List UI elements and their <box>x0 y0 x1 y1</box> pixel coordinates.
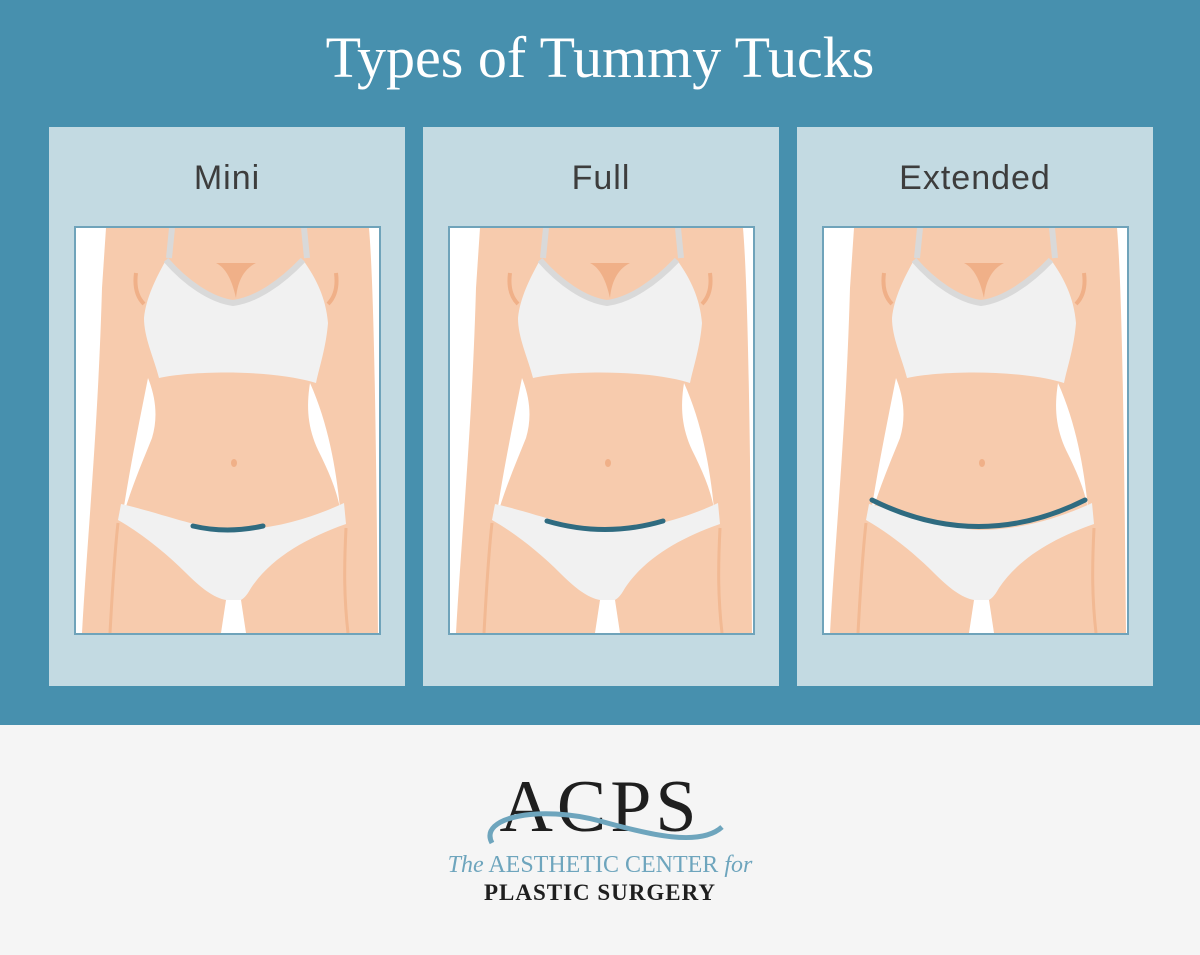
header background <box>0 0 1200 725</box>
panel: full <box>423 127 779 686</box>
title: Types of Tummy Tucks <box>326 25 874 90</box>
logo: ACPS <box>499 766 701 848</box>
illustration: mini incision <box>74 226 381 635</box>
logo: The AESTHETIC CENTER for <box>448 852 753 878</box>
illustration: full incision <box>448 226 755 635</box>
panel: extended <box>797 127 1153 686</box>
heading: full: Full <box>572 159 630 197</box>
heading: mini: Mini <box>194 159 260 197</box>
panel: mini <box>49 127 405 686</box>
logo: PLASTIC SURGERY <box>484 880 716 905</box>
illustration: extended incision <box>822 226 1129 635</box>
heading: extended: Extended <box>899 159 1051 197</box>
logo <box>448 766 753 905</box>
